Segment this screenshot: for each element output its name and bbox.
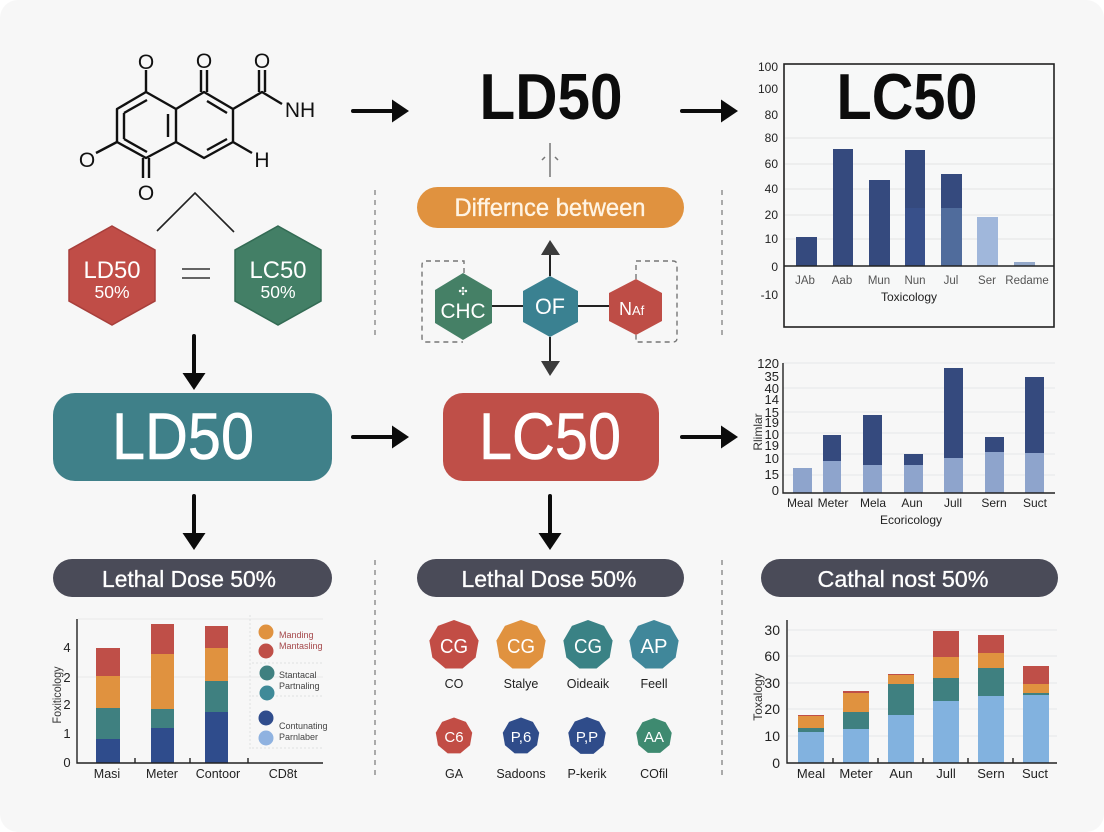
stacked chart: right: Aun	[889, 766, 913, 781]
bar chart: Ecoricology: Sern	[981, 496, 1007, 510]
bar chart: LC50: -10	[761, 288, 778, 302]
hexagon: LD50 50%	[69, 226, 155, 325]
legend	[250, 615, 328, 750]
arrow: molecule to LD50	[353, 109, 393, 113]
arrow: LD50 to chart	[682, 109, 722, 113]
stacked chart: right: Jull	[936, 766, 956, 781]
stacked chart: right: Toxalogy	[751, 673, 765, 721]
badge grid: CG	[507, 636, 535, 658]
stacked chart: left: Meter	[146, 767, 178, 781]
box: LC50: LC50	[479, 399, 621, 473]
bar chart: LC50: 80	[765, 131, 778, 145]
pill: Cathal nost 50% right	[761, 559, 1058, 597]
stacked chart: right: 10	[764, 728, 780, 744]
bar chart: Ecoricology: 15	[765, 405, 779, 420]
stacked chart: right: 30	[764, 622, 780, 638]
molecule structure: O	[254, 50, 270, 73]
hexagon: LD50 50%: 50%	[94, 282, 130, 302]
badge grid: AP	[640, 636, 668, 658]
stacked chart: right: Meal	[797, 766, 825, 781]
legend: Stantacal	[279, 670, 317, 680]
hexagon network: ✣	[458, 286, 468, 298]
pill: Lethal Dose 50% centre: Lethal Dose 50%	[462, 566, 636, 592]
box: LC50	[443, 393, 659, 481]
bar chart: Ecoricology	[751, 356, 1055, 527]
molecule structure: O	[196, 50, 212, 73]
bar chart: Ecoricology: Mela	[860, 496, 886, 510]
badge grid: P-kerik	[568, 767, 607, 781]
stacked chart: right: 60	[764, 648, 780, 664]
stacked chart: left: 2	[63, 697, 71, 712]
bar chart: Ecoricology: Suct	[1023, 496, 1048, 510]
bar chart: LC50: Toxicology	[881, 290, 937, 304]
small upward arrow	[542, 143, 558, 177]
molecule structure: H	[254, 149, 270, 172]
bar chart: LC50: 100	[758, 60, 778, 74]
stacked chart: left: CD8t	[269, 767, 298, 781]
pill: Difference between: Differnce between	[454, 194, 646, 222]
bar chart: Ecoricology: 14	[765, 392, 779, 407]
bar chart: Ecoricology: 10	[765, 427, 779, 442]
bar chart: Ecoricology: 40	[765, 381, 779, 396]
arrow: LD50 box down	[192, 496, 196, 534]
hexagon: LC50 50%	[235, 226, 321, 325]
bar chart: Ecoricology: 19	[765, 438, 779, 453]
arrow: LC50 box to chart	[682, 435, 722, 439]
legend: Parnlaber	[279, 732, 318, 742]
badge grid: Oideaik	[567, 677, 610, 691]
bar chart: Ecoricology: Ecoricology	[880, 513, 942, 527]
pill: Lethal Dose 50% left	[53, 559, 332, 597]
badge grid: CO	[445, 677, 464, 691]
bar chart: LC50: Mun	[868, 275, 890, 287]
stacked chart: right: Sern	[977, 766, 1005, 781]
stacked chart: left: 0	[63, 755, 71, 770]
equals sign	[182, 269, 210, 278]
stacked chart: right: Meter	[839, 766, 873, 781]
bar chart: LC50: Nun	[904, 275, 926, 287]
bar chart: LC50: 40	[765, 182, 778, 196]
hexagon: LD50 50%: LD50	[84, 257, 140, 284]
legend: Contunating	[279, 721, 328, 731]
bar chart: LC50	[758, 60, 1054, 327]
caret line	[157, 193, 234, 232]
stacked chart: right: 0	[772, 755, 780, 771]
badge grid: CG	[574, 636, 602, 658]
heading: LD50: LD50	[480, 60, 622, 133]
stacked chart: right: Suct	[1022, 766, 1048, 781]
hexagon network: NAf	[619, 299, 645, 319]
bar chart: Ecoricology: 35	[765, 369, 779, 384]
badge grid: GA	[445, 767, 464, 781]
badge grid: Sadoons	[496, 767, 546, 781]
legend: Manding	[279, 630, 314, 640]
bar chart: LC50: 0	[771, 260, 778, 274]
bar chart: LC50: 100	[758, 82, 778, 96]
stacked chart: left: 2	[63, 670, 71, 685]
badge grid: COfil	[640, 767, 668, 781]
bar chart: LC50: Jul	[944, 275, 958, 287]
stacked chart: left: Contoor	[196, 767, 240, 781]
hexagon: LC50 50%: LC50	[250, 257, 306, 284]
bar chart: Ecoricology: 10	[765, 451, 779, 466]
stacked chart: left	[50, 615, 328, 781]
arrow: hexagon to LD50 box	[192, 336, 196, 374]
arrow: LC50 box down	[548, 496, 552, 534]
legend: Partnaling	[279, 681, 320, 691]
badge grid: Feell	[640, 677, 668, 691]
stacked chart: left: Masi	[94, 767, 120, 781]
stacked chart: left: 1	[63, 726, 71, 741]
badge grid: P,6	[511, 729, 531, 746]
stacked chart: right	[751, 620, 1057, 781]
stacked chart: right: 20	[764, 701, 780, 717]
bar chart: LC50: 60	[765, 157, 778, 171]
box: LD50	[53, 393, 332, 481]
hexagon: LC50 50%: 50%	[260, 282, 296, 302]
molecule structure	[79, 50, 315, 205]
bar chart: LC50: Aab	[832, 275, 852, 287]
bar chart: Ecoricology: 120	[757, 356, 779, 371]
badge grid: AA	[644, 729, 664, 746]
stacked chart: right: 30	[764, 675, 780, 691]
bar chart: LC50: JAb	[795, 275, 815, 287]
hexagon network: CHC	[440, 300, 486, 323]
molecule structure: O	[138, 51, 154, 74]
bar chart: Ecoricology: 19	[765, 415, 779, 430]
box: LD50: LD50	[112, 399, 254, 473]
bar chart: Ecoricology: Aun	[901, 496, 923, 510]
molecule structure: O	[138, 182, 154, 205]
hexagon network: OF	[535, 294, 565, 319]
bar chart: LC50: 80	[765, 108, 778, 122]
bar chart: Ecoricology: 15	[765, 467, 779, 482]
pill: Lethal Dose 50% left: Lethal Dose 50%	[102, 566, 276, 592]
bar chart: LC50: Redame	[1005, 275, 1049, 287]
stacked chart: left: Foxiticology	[50, 666, 64, 724]
dashed dividers	[375, 190, 722, 780]
bar chart: Ecoricology: Meal	[787, 496, 813, 510]
molecule structure: NH	[285, 99, 315, 122]
bar chart: LC50: 20	[765, 208, 778, 222]
bar chart: Ecoricology: Meter	[818, 496, 848, 510]
pill: Difference between	[417, 187, 684, 228]
badge grid: Stalye	[504, 677, 538, 691]
pill: Lethal Dose 50% centre	[417, 559, 684, 597]
bar chart: Ecoricology: Rlimlar	[751, 413, 765, 451]
pill: Cathal nost 50% right: Cathal nost 50%	[818, 566, 988, 592]
badge grid: C6	[444, 729, 464, 746]
badge grid: CG	[440, 636, 468, 658]
bar chart: LC50: Ser	[978, 275, 996, 287]
bar chart: Ecoricology: Jull	[944, 496, 962, 510]
badge grid	[429, 620, 679, 781]
hexagon network	[422, 240, 677, 376]
bar chart: LC50: 10	[765, 232, 778, 246]
badge grid: P,P	[576, 729, 598, 746]
heading: LC50: LC50	[836, 60, 978, 133]
stacked chart: left: 4	[63, 640, 71, 655]
arrow: LD50 box to LC50 box	[353, 435, 393, 439]
molecule structure: O	[79, 149, 95, 172]
bar chart: Ecoricology: 0	[772, 483, 779, 498]
legend: Mantasling	[279, 641, 323, 651]
